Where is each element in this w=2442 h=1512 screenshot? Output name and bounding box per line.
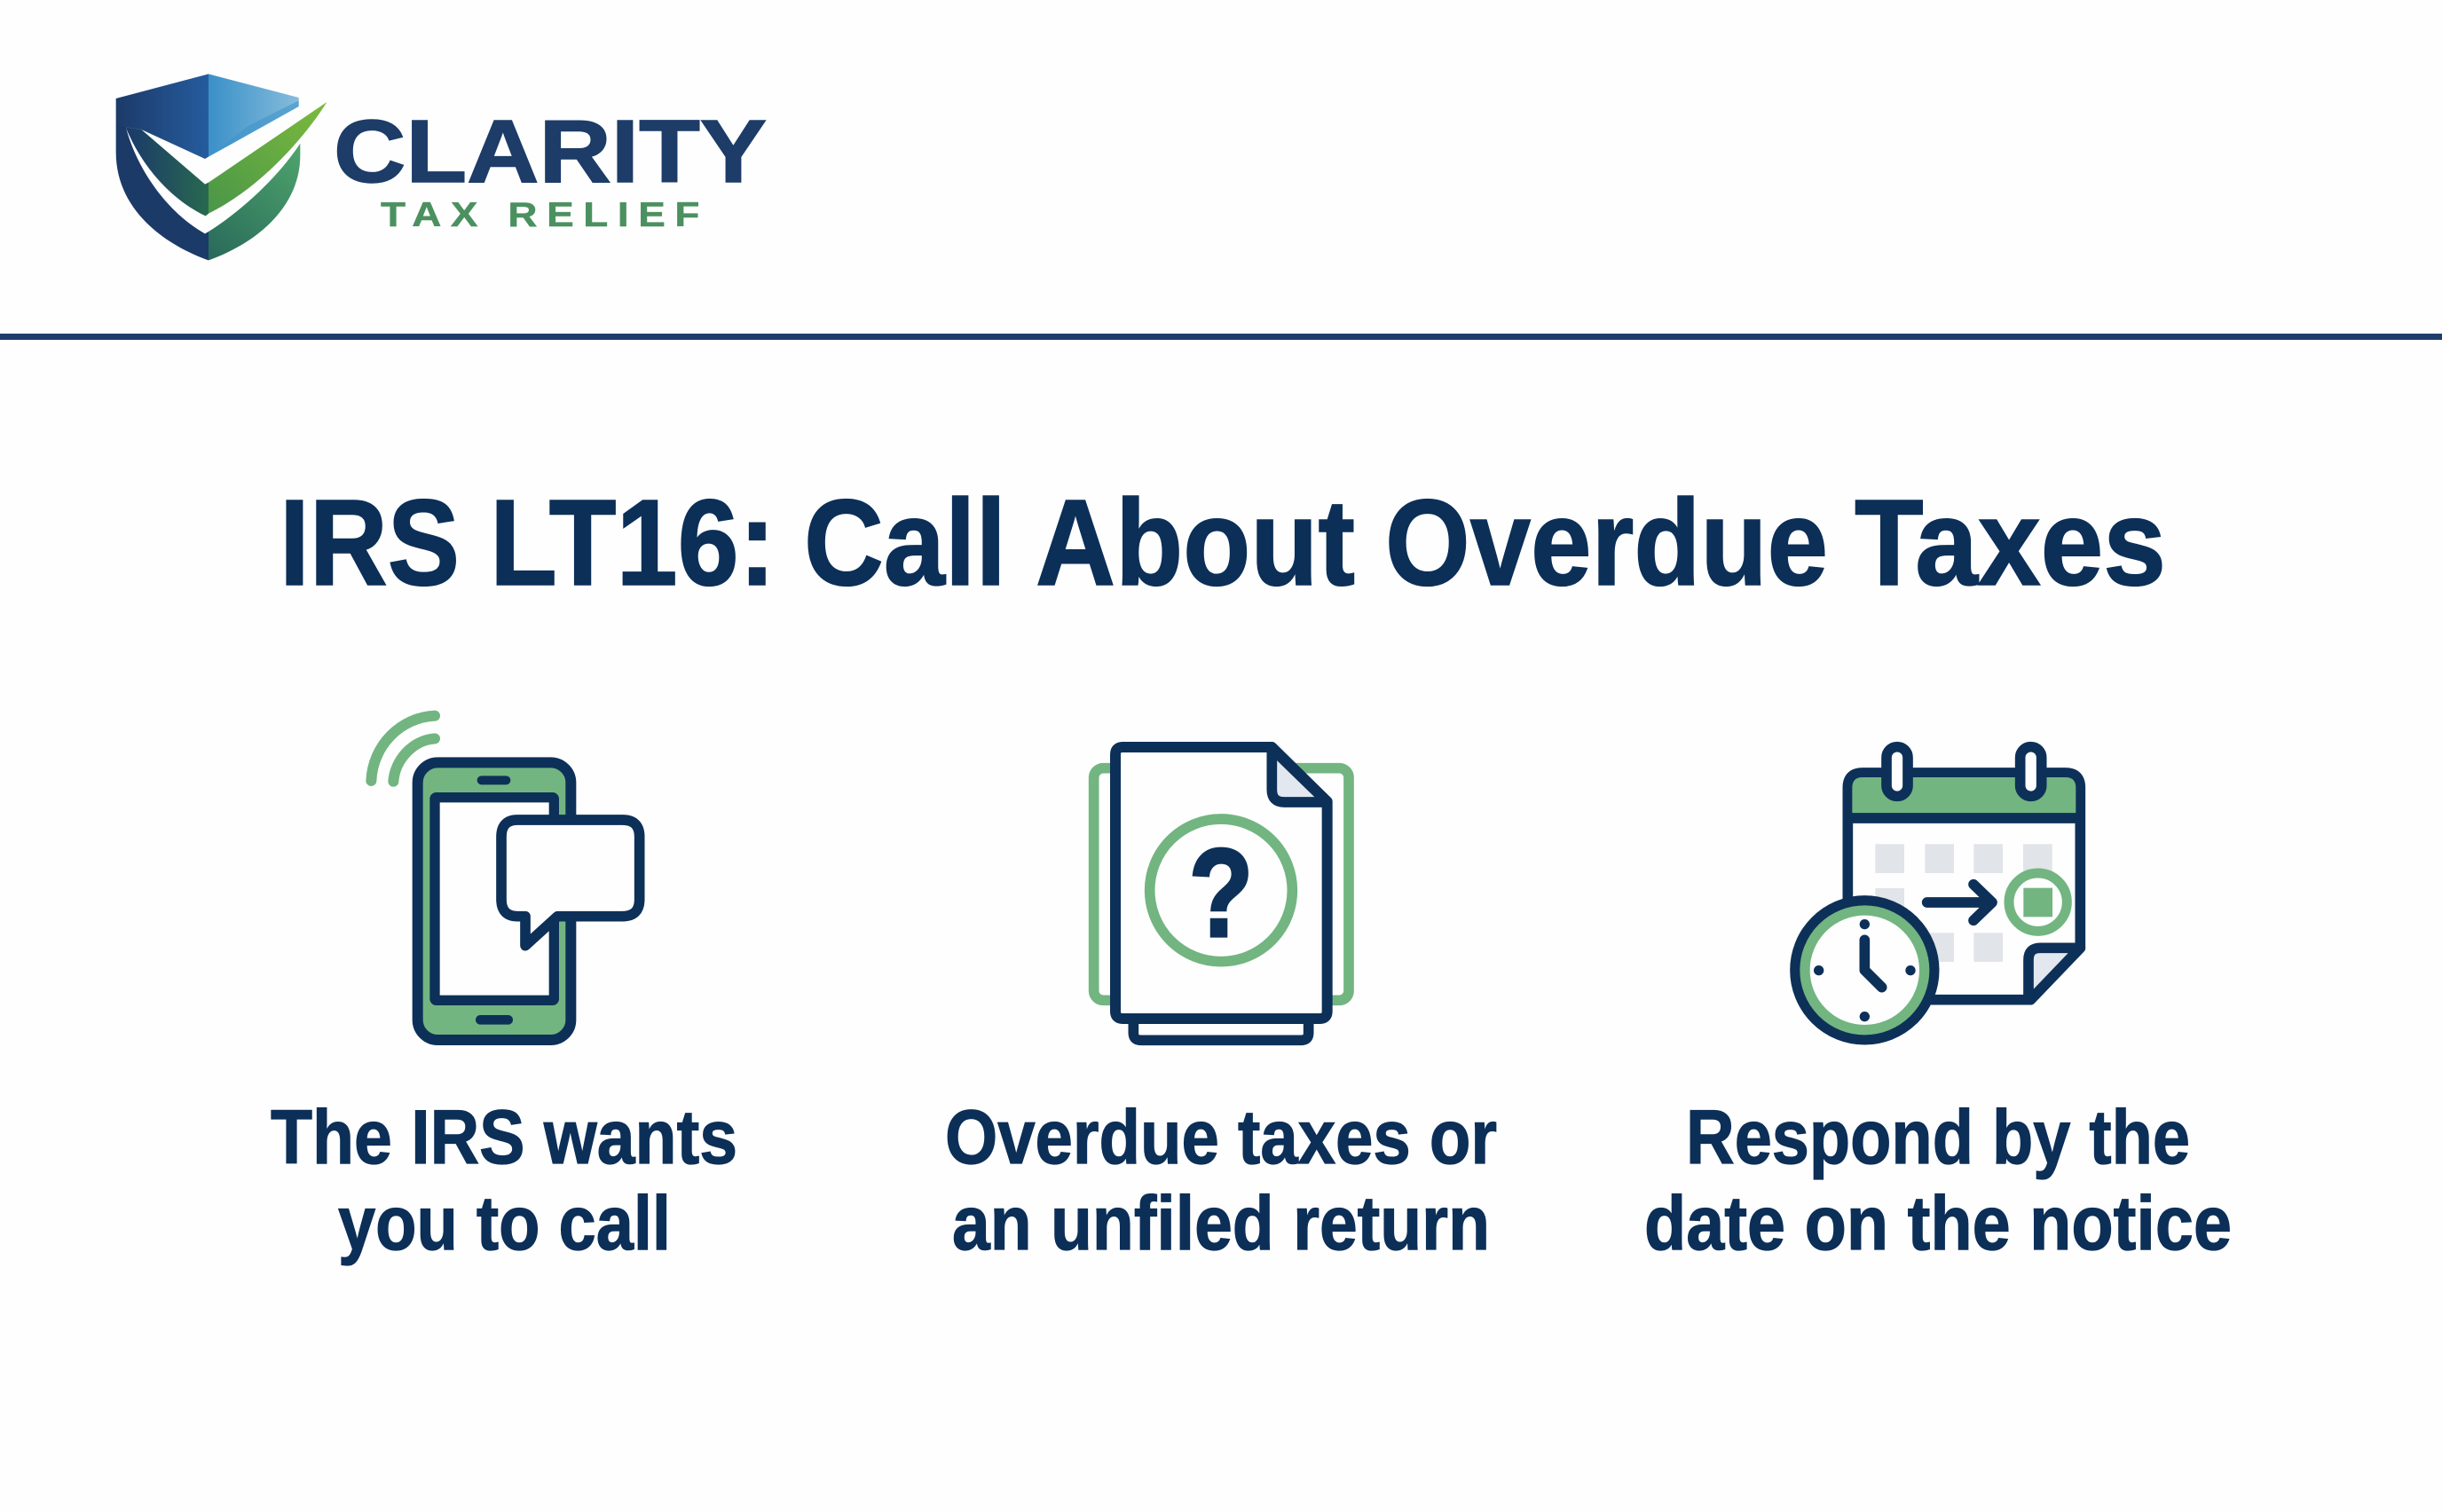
arrow (1927, 885, 1992, 920)
icon: document with question mark (1094, 747, 1349, 1040)
phone screen (435, 798, 554, 1000)
back page (1094, 768, 1349, 1000)
icon: phone with speech bubble (371, 716, 640, 1040)
panel: respond by the date (1644, 747, 2232, 1266)
page foot (1133, 1014, 1309, 1040)
folded corner (1272, 748, 1327, 802)
title: Taxes (1855, 475, 2166, 611)
calendar header (1852, 777, 2076, 818)
phone speaker and button (480, 780, 508, 1020)
logo wordmark: CLARITY (334, 102, 767, 201)
calendar rings (1887, 747, 2042, 796)
main page (1115, 747, 1327, 1019)
panel: overdue taxes or unfiled return (945, 747, 1497, 1266)
signal arcs (371, 716, 435, 782)
question mark: ? (1189, 823, 1253, 963)
caption: you to call (338, 1181, 671, 1266)
caption: Respond by the (1686, 1095, 2190, 1180)
header divider line (0, 334, 2442, 340)
date squares (1875, 844, 2052, 962)
title: LT16: (490, 475, 776, 611)
caption: date on the notice (1644, 1181, 2232, 1266)
speech bubble (501, 820, 640, 946)
icon: calendar with clock (1795, 747, 2080, 1040)
caption: The IRS wants (271, 1095, 737, 1180)
question circle (1150, 819, 1292, 962)
logo tagline: TAX RELIEF (381, 196, 709, 234)
logo: Clarity Tax Relief (116, 74, 767, 260)
panel: call the IRS (271, 716, 737, 1266)
page curl (2028, 948, 2080, 1000)
title: IRS (280, 475, 460, 611)
phone body (418, 762, 571, 1040)
title: Call (804, 475, 1006, 611)
caption: Overdue taxes or (945, 1095, 1497, 1180)
calendar page (1847, 773, 2080, 1000)
clock (1795, 901, 1934, 1040)
due date marker (2009, 873, 2067, 931)
caption: an unfiled return (952, 1181, 1490, 1266)
title: Overdue (1385, 475, 1828, 611)
title: About (1036, 475, 1355, 611)
icon: shield with checkmark (116, 74, 327, 260)
